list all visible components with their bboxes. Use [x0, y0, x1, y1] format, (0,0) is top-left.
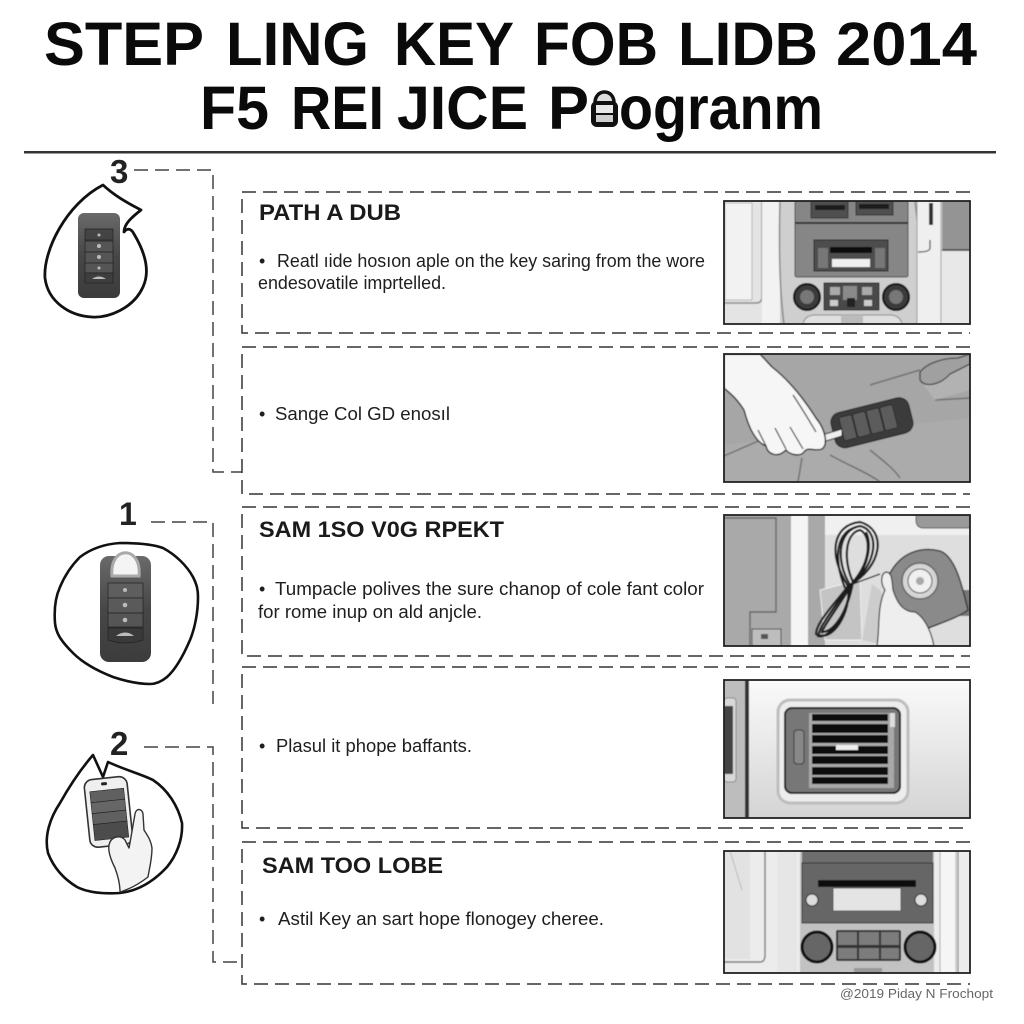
title: STEP [44, 10, 204, 78]
title: F5 [200, 74, 269, 142]
panel 1 heading: PATH A DUB [259, 200, 401, 225]
panel 1 text: Reatl ıide hosıon aple on the key saring from the wore [277, 251, 705, 271]
title: FOB [534, 10, 658, 78]
panel 1 text: endesovatile imprtelled. [258, 273, 446, 293]
panel 3 heading: SAM 1SO V0G RPEKT [259, 517, 505, 542]
title: KEY [394, 10, 514, 78]
title: REI [291, 74, 384, 142]
panel 4 border [242, 667, 970, 828]
panel 1 text [258, 251, 705, 293]
panel 5 image frame [724, 851, 970, 973]
panel 3 border [242, 507, 970, 656]
step connectors [134, 170, 242, 962]
panel 5 image: radio and climate console [724, 851, 970, 973]
panel 1 border [242, 192, 970, 333]
title: LIDB [678, 10, 818, 78]
panel 2 text: • [259, 404, 265, 424]
icon: hand pressing key fob in bubble 2 [47, 755, 182, 893]
panel 3 [242, 507, 970, 656]
header divider [24, 151, 996, 154]
step 2 marker: 2 [110, 725, 128, 762]
panel 5 border [242, 842, 970, 984]
panel 3 image: ignition and wire [724, 515, 970, 646]
panel 3 text: for rome inup on ald anjcle. [258, 602, 482, 622]
panel 5 heading: SAM TOO LOBE [262, 853, 443, 878]
panel 5 [242, 842, 970, 984]
icon: key fob in bubble 1 [55, 543, 198, 684]
step 2 marker [47, 725, 182, 893]
title: 2014 [836, 10, 977, 78]
panel 4 text: Plasul it phope baffants. [276, 736, 472, 756]
step 1 marker: 1 [119, 496, 137, 532]
step 1 marker [55, 496, 198, 684]
panel 1 image: dashboard console [724, 201, 970, 324]
footer credit: @2019 Piday N Frochopt [840, 986, 993, 1001]
panel 1 image frame [724, 201, 970, 324]
title: LING [226, 10, 369, 78]
step 3 marker [45, 153, 146, 317]
title [44, 10, 977, 142]
panel 1 text: • [259, 251, 265, 271]
panel 4 image frame [724, 680, 970, 818]
panel 5 text: • [259, 909, 265, 929]
icon: key fob in speech bubble 3 [45, 185, 146, 317]
panel 2 image frame [724, 354, 970, 482]
panel 2 [242, 347, 970, 494]
panel 4 [242, 667, 970, 828]
icon: padlock in title [591, 92, 618, 127]
panel 3 text: • [259, 579, 265, 599]
panel 2 text: Sange Col GD enosıl [275, 404, 450, 424]
panel 5 text: Astil Key an sart hope flonogey cheree. [278, 909, 604, 929]
panel 4 text: • [259, 736, 265, 756]
step 3 marker: 3 [110, 153, 128, 190]
panel 1 [242, 192, 970, 333]
title: ogranm [619, 74, 823, 142]
panel 3 text: Tumpacle polives the sure chanop of cole fant color [275, 579, 704, 599]
panel 2 border [242, 347, 970, 494]
title: P [548, 74, 589, 142]
title: JICE [397, 74, 528, 142]
panel 2 image: hand holding key fob [724, 354, 970, 482]
panel 3 text [258, 579, 704, 622]
panel 4 image: air vent [724, 680, 970, 818]
panel 3 image frame [724, 515, 970, 646]
